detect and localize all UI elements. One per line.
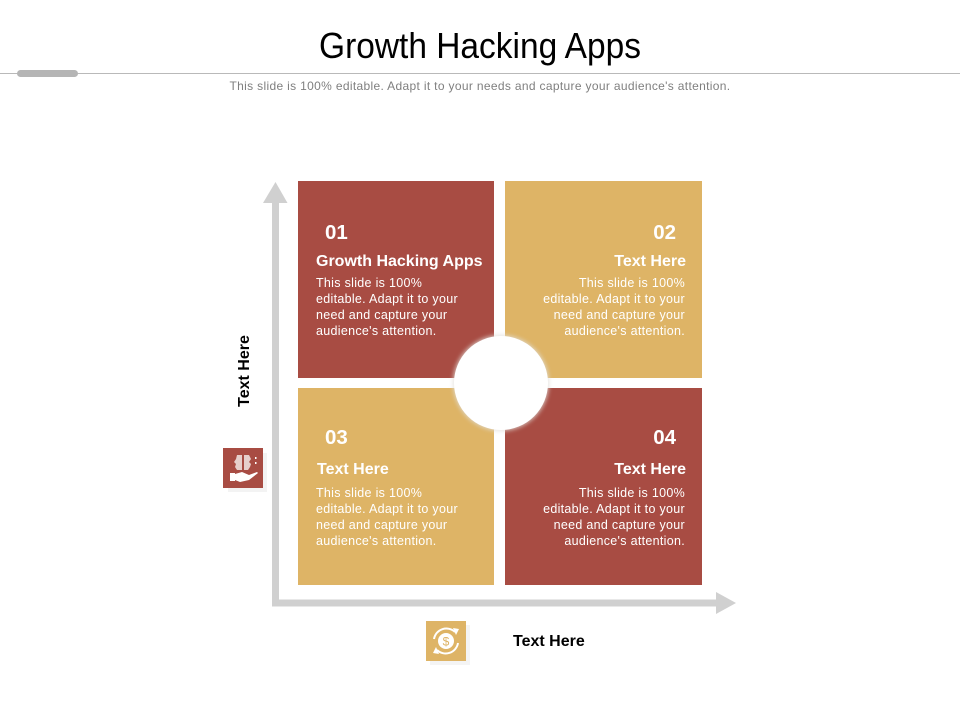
icon: hand holding brain xyxy=(223,448,267,492)
center circle xyxy=(454,336,548,430)
body 03: This slide is 100% xyxy=(316,486,422,500)
body 01: need and capture your xyxy=(316,308,447,322)
panel 03 xyxy=(298,388,494,585)
number 04: 04 xyxy=(653,426,676,449)
subtitle: This slide is 100% editable. Adapt it to your needs and capture your audience's attention. xyxy=(230,79,730,93)
y axis label: Text Here xyxy=(236,335,253,407)
title: Growth Hacking Apps xyxy=(319,25,641,66)
body 03: editable. Adapt it to your xyxy=(316,502,458,516)
panel 02 xyxy=(505,181,702,378)
header rule with pill xyxy=(0,73,960,74)
body 02: audience's attention. xyxy=(564,324,685,338)
body 03: need and capture your xyxy=(316,518,447,532)
body 02: This slide is 100% xyxy=(579,276,685,290)
body 03: audience's attention. xyxy=(316,534,437,548)
x axis label: Text Here xyxy=(513,633,585,650)
body 01: This slide is 100% xyxy=(316,276,422,290)
body 04 xyxy=(543,486,685,548)
body 04: This slide is 100% xyxy=(579,486,685,500)
icon: dollar cycle: $ xyxy=(443,634,450,648)
body 04: need and capture your xyxy=(554,518,685,532)
panel 04 xyxy=(505,388,702,585)
heading 03: Text Here xyxy=(317,461,389,478)
axes arrows xyxy=(263,182,736,614)
header pill xyxy=(17,70,78,77)
panel 01 xyxy=(298,181,494,378)
body 02: editable. Adapt it to your xyxy=(543,292,685,306)
heading 02: Text Here xyxy=(614,253,686,270)
icon: dollar cycle xyxy=(426,621,470,665)
number 01: 01 xyxy=(325,221,348,244)
body 02 xyxy=(543,276,685,338)
number 02: 02 xyxy=(653,221,676,244)
body 01 xyxy=(316,276,458,338)
body 01: editable. Adapt it to your xyxy=(316,292,458,306)
heading 01: Growth Hacking Apps xyxy=(316,253,483,270)
body 03 xyxy=(316,486,458,548)
body 04: audience's attention. xyxy=(564,534,685,548)
body 04: editable. Adapt it to your xyxy=(543,502,685,516)
number 03: 03 xyxy=(325,426,348,449)
body 02: need and capture your xyxy=(554,308,685,322)
body 01: audience's attention. xyxy=(316,324,437,338)
heading 04: Text Here xyxy=(614,461,686,478)
